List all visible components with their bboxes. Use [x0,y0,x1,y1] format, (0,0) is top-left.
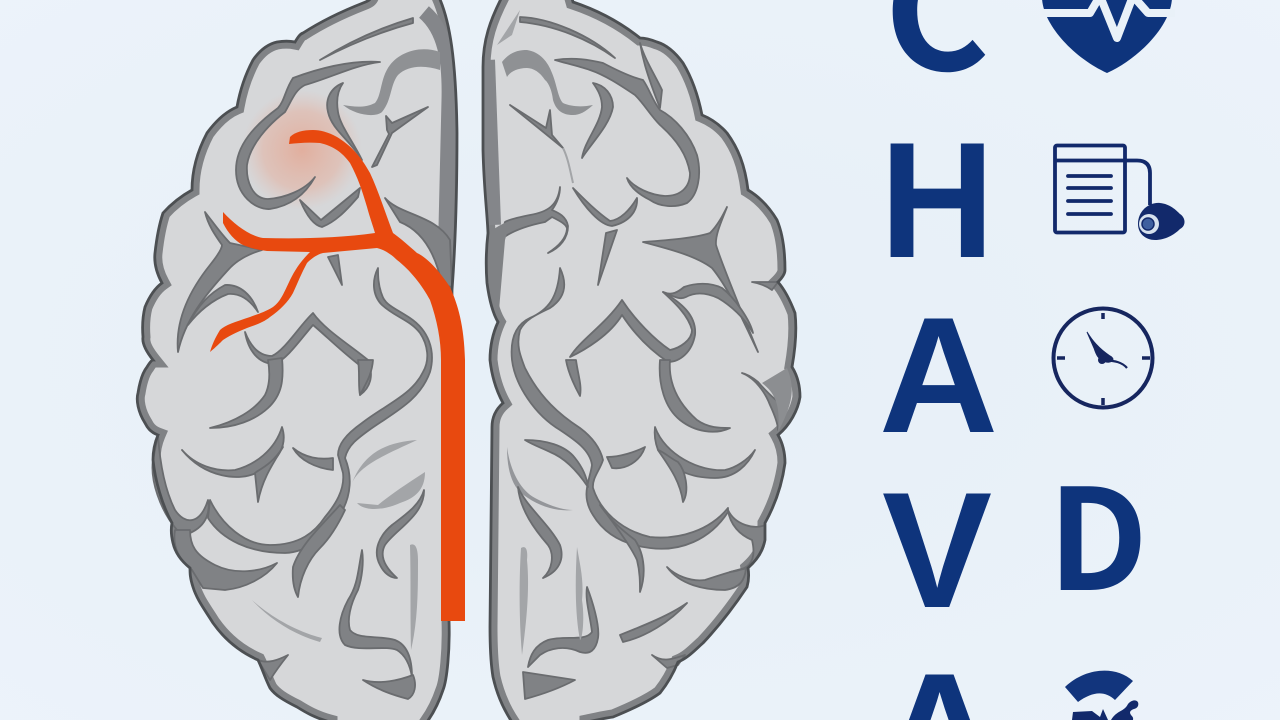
bulb [1138,203,1184,240]
right hemisphere [483,0,800,720]
icon: wifi arc with figure [1065,671,1138,720]
right outer outline [483,0,800,720]
icon: document with bulb [1055,146,1184,240]
infarct glow [242,90,362,210]
letter D: D [1048,429,1148,631]
icon: clock [1054,308,1152,408]
letter H: H [880,109,994,293]
left hemisphere [137,0,457,720]
letter V: V [882,458,992,642]
artery [210,130,465,621]
left outer outline [137,0,457,720]
icon: shield with heartbeat [1040,0,1175,73]
letter column [879,0,1148,720]
brain illustration [137,0,800,720]
letter A: A [879,283,998,467]
